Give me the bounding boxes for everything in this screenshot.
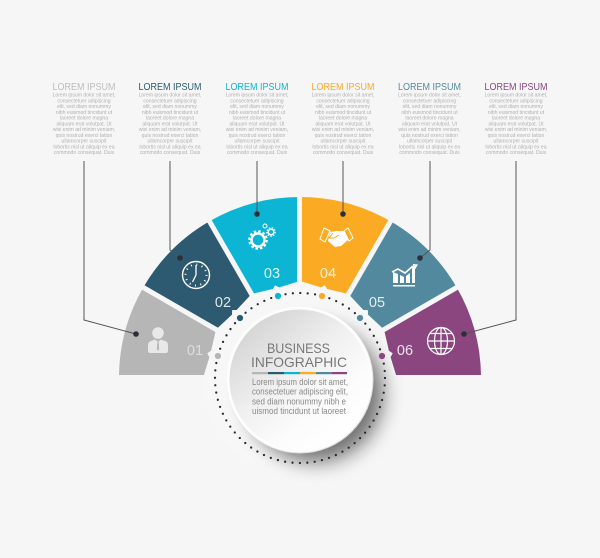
- column 5 text: aliquam erat volutpat. Ut: [402, 121, 458, 127]
- column 2 text: ullamcorper suscipit: [147, 138, 193, 144]
- column 6 text: wisi enim ad minim veniam,: [485, 127, 547, 133]
- number 04: 04: [320, 266, 336, 282]
- column 6 text: commodo consequat. Duis: [486, 150, 547, 156]
- dotted ring: [215, 293, 385, 463]
- column 4 text: wisi enim ad minim veniam,: [312, 127, 374, 133]
- column 2 text: nibh euismod tincidunt ut: [142, 110, 199, 116]
- column 6 text: aliquam erat volutpat. Ut: [488, 121, 544, 127]
- number 05: 05: [369, 295, 385, 311]
- column 1 text: [52, 81, 116, 156]
- column 4 text: [312, 81, 374, 156]
- column 5 text: LOREM IPSUM: [398, 81, 461, 93]
- column 1 text: aliquam erat volutpat. Ut: [56, 121, 112, 127]
- column 1 text: nibh euismod tincidunt ut: [56, 110, 113, 116]
- icon: handshake: [320, 228, 353, 247]
- column 1 text: ullamcorper suscipit: [61, 138, 107, 144]
- column 2 text: consectetuer adipiscing: [143, 98, 197, 104]
- column 6 text: nibh euismod tincidunt ut: [488, 110, 545, 116]
- column 3 text: quis nostrud exerci tation: [229, 133, 285, 139]
- column 2 text: commodo consequat. Duis: [140, 150, 201, 156]
- column 6 text: consectetuer adipiscing: [489, 98, 543, 104]
- column 3 text: lobortis nisl ut aliquip ex ea: [226, 144, 288, 150]
- segment 06 purple: [300, 288, 481, 378]
- leader 4: [340, 161, 346, 217]
- column 4 text: ullamcorper suscipit: [320, 138, 366, 144]
- column 1 text: Lorem ipsum dolor sit amet,: [53, 92, 115, 98]
- column 1 text: LOREM IPSUM: [52, 81, 116, 93]
- column 4 text: consectetuer adipiscing: [316, 98, 370, 104]
- column 4 text: aliquam erat volutpat. Ut: [315, 121, 371, 127]
- column 2 text: laoreet dolore magna: [146, 116, 194, 122]
- column 5 text: consectetuer adipiscing: [403, 98, 456, 104]
- segment 02 dark teal: [143, 221, 300, 378]
- column 2 text: quis nostrud exerci tation: [142, 133, 198, 139]
- leader 3: [254, 161, 260, 217]
- column 3 text: ullamcorper suscipit: [234, 138, 280, 144]
- segment 01 grey: [119, 288, 300, 378]
- central description: Lorem ipsum dolor sit amet,: [252, 377, 348, 388]
- column 5 text: laoreet dolore magna: [405, 116, 454, 122]
- central description: [252, 377, 348, 417]
- column 3 text: commodo consequat. Duis: [227, 150, 288, 156]
- column 5 text: Lorem ipsum dolor sit amet,: [398, 92, 461, 98]
- disc shadow: [247, 326, 383, 462]
- leader 6: [461, 161, 516, 337]
- column 1 text: laoreet dolore magna: [60, 116, 108, 122]
- central title: [251, 340, 347, 370]
- column 5 text: commodo consequat. Duis: [399, 150, 460, 156]
- column 1 text: wisi enim ad minim veniam,: [53, 127, 115, 133]
- icon: growth chart: [392, 264, 418, 286]
- column 4 text: laoreet dolore magna: [319, 116, 367, 122]
- column 5 text: quis nostrud exerci tation: [401, 133, 458, 139]
- icon: person: [148, 327, 168, 353]
- central disc: [226, 306, 374, 454]
- column 5 text: nibh euismod tincidunt ut: [401, 110, 458, 116]
- segment 05 steel blue: [300, 221, 457, 378]
- column 1 text: lobortis nisl ut aliquip ex ea: [53, 144, 115, 150]
- column 6 text: elit, sed diam nonummy: [489, 104, 543, 110]
- column 4 text: elit, sed diam nonummy: [316, 104, 370, 110]
- column 2 text: [138, 81, 202, 156]
- central description: uismod tincidunt ut laoreet: [252, 406, 346, 417]
- segment gaps: [130, 190, 470, 378]
- column 3 text: elit, sed diam nonummy: [230, 104, 284, 110]
- segment 04 orange: [300, 197, 390, 378]
- column 3 text: wisi enim ad minim veniam,: [226, 127, 288, 133]
- column 1 text: commodo consequat. Duis: [54, 150, 115, 156]
- column 6 text: [484, 81, 548, 156]
- central description: sed diam nonummy nibh e: [252, 396, 346, 408]
- column 4 text: nibh euismod tincidunt ut: [315, 110, 372, 116]
- number 06: 06: [397, 343, 413, 359]
- column 5 text: elit, sed diam nonummy: [403, 104, 457, 110]
- column 3 text: laoreet dolore magna: [233, 116, 281, 122]
- icon: clock: [182, 262, 210, 288]
- column 6 text: quis nostrud exerci tation: [488, 133, 544, 139]
- number 03: 03: [264, 266, 280, 282]
- column 3 text: LOREM IPSUM: [226, 81, 288, 93]
- column 1 text: consectetuer adipiscing: [57, 98, 111, 104]
- central description: consectetuer adipiscing elit,: [252, 386, 348, 398]
- column 3 text: aliquam erat volutpat. Ut: [229, 121, 285, 127]
- segment 03 cyan: [210, 197, 300, 378]
- column 3 text: [226, 81, 288, 156]
- column 2 text: aliquam erat volutpat. Ut: [142, 121, 198, 127]
- column 6 text: Lorem ipsum dolor sit amet,: [485, 92, 547, 98]
- column 2 text: Lorem ipsum dolor sit amet,: [139, 92, 201, 98]
- column 3 text: nibh euismod tincidunt ut: [229, 110, 286, 116]
- column 1 text: elit, sed diam nonummy: [57, 104, 111, 110]
- coloured ring markers: [215, 293, 385, 359]
- column 3 text: Lorem ipsum dolor sit amet,: [226, 92, 288, 98]
- gear-shaped ring base: [203, 281, 397, 475]
- column 2 text: LOREM IPSUM: [138, 81, 202, 93]
- column 4 text: lobortis nisl ut aliquip ex ea: [312, 144, 374, 150]
- column 6 text: ullamcorper suscipit: [493, 138, 539, 144]
- column 5 text: lobortis nisl ut aliquip ex ea: [399, 144, 460, 150]
- column 5 text: [398, 81, 461, 156]
- icon: globe: [428, 328, 454, 354]
- icon: gears: [249, 224, 275, 249]
- column 2 text: wisi enim ad minim veniam,: [139, 127, 201, 133]
- number 02: 02: [215, 295, 231, 311]
- column 3 text: consectetuer adipiscing: [230, 98, 284, 104]
- number 01: 01: [187, 343, 203, 359]
- column 1 text: quis nostrud exerci tation: [56, 133, 112, 139]
- leader 1: [84, 161, 139, 337]
- colour bar: [252, 372, 347, 374]
- leader 2: [170, 161, 183, 261]
- column 5 text: wisi enim ad minim veniam,: [398, 127, 461, 133]
- column 6 text: laoreet dolore magna: [492, 116, 540, 122]
- column 2 text: elit, sed diam nonummy: [143, 104, 197, 110]
- column 6 text: LOREM IPSUM: [484, 81, 548, 93]
- column 4 text: LOREM IPSUM: [312, 81, 374, 93]
- column 4 text: commodo consequat. Duis: [313, 150, 374, 156]
- central title: BUSINESS: [267, 340, 330, 356]
- column 4 text: Lorem ipsum dolor sit amet,: [312, 92, 374, 98]
- leader 5: [417, 161, 430, 261]
- central title: INFOGRAPHIC: [251, 354, 347, 370]
- column 2 text: lobortis nisl ut aliquip ex ea: [139, 144, 201, 150]
- column 4 text: quis nostrud exerci tation: [315, 133, 371, 139]
- column 5 text: ullamcorper suscipit: [407, 138, 453, 144]
- column 6 text: lobortis nisl ut aliquip ex ea: [485, 144, 547, 150]
